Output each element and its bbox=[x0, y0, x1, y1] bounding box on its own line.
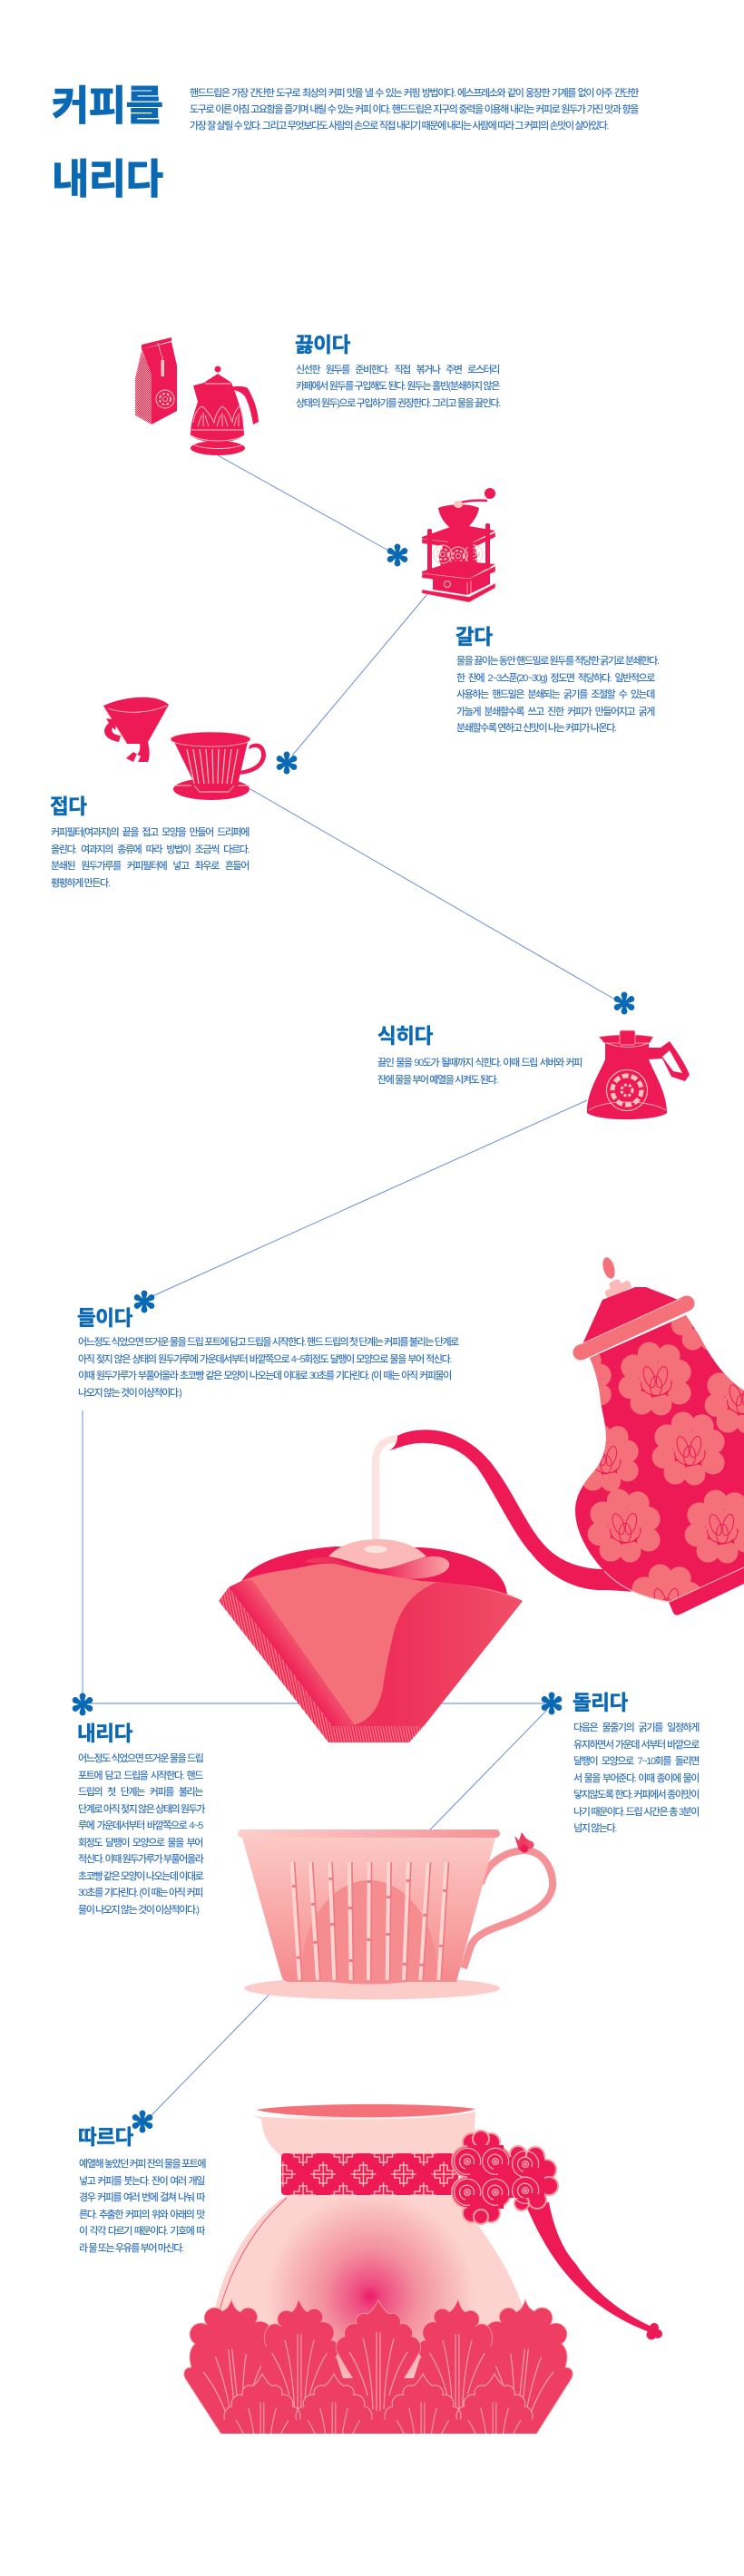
text block: 돌리다: 나기 때문이다. 드립 시간은 총 3분이 bbox=[573, 1807, 699, 1818]
text block: 내리다: 물이 나오지 않는 것이 이상적이다.) bbox=[78, 1905, 199, 1916]
text block: 내리다: 초코빵 같은 모양이 나오는데 이대로 bbox=[78, 1870, 202, 1881]
title: 커피를 bbox=[52, 83, 162, 129]
icon: kettle bbox=[191, 366, 259, 455]
connector line: horizontal to 돌리다 bbox=[83, 1703, 552, 1704]
dripper dome bbox=[301, 1880, 437, 1985]
pot collar bbox=[581, 1299, 687, 1352]
text block: 내리다: 적신다. 이때 원두가루가 부풀어올라 bbox=[78, 1854, 202, 1865]
text block: 갈다: 물을 끓이는 동안 핸드밀로 원두를 적당한 굵기로 분쇄한다. bbox=[456, 656, 659, 667]
heading: 돌리다: 돌리다 bbox=[573, 1692, 628, 1714]
text block: 들이다: 어느정도 식었으면 뜨거운 물을 드립 포트에 담고 드립을 시작한다. 핸드 드립의 첫 단계는 커피를 불리는 단계로 bbox=[78, 1337, 458, 1348]
illustration: large dripper bbox=[238, 1830, 553, 1999]
text block: 들이다: 이때 원두가루가 부풀어올라 초코빵 같은 모양이 나오는데 이대로 30초를 기다린다. (이 때는 아직 커피물이 bbox=[78, 1371, 451, 1381]
pot lid bbox=[582, 1287, 690, 1346]
text block: intro: 핸드드립은 가장 간단한 도구로 최상의 커피 맛을 낼 수 있는 커핑 방법이다. 에스프레소와 같이 웅장한 기계를 없이 아주 간단한 bbox=[190, 87, 638, 98]
title bbox=[52, 83, 163, 202]
pot body bbox=[575, 1315, 744, 1602]
connector line: vertical to 내리다 bbox=[82, 1410, 83, 1703]
server ribbon bbox=[526, 2202, 651, 2333]
pot spout bbox=[387, 1429, 635, 1592]
heading: 따르다: 따르다 bbox=[78, 2126, 133, 2149]
title: 내리다 bbox=[52, 156, 162, 202]
server neck bbox=[251, 2111, 475, 2157]
text block: 끓이다: 상태의 원두)으로 구입하기를 권장한다. 그리고 물을 끓인다. bbox=[296, 397, 500, 408]
text block: 내리다: 루에 가운데서부터 바깥쪽으로 4~5 bbox=[78, 1820, 202, 1831]
text block: 들이다: 아직 젖지 않은 상태의 원두가루에 가운데서부터 바깥쪽으로 4~5회정도 달팽이 모양으로 물을 부어 적신다. bbox=[78, 1353, 451, 1364]
connector line: dripper to server bbox=[250, 789, 615, 1000]
text block: 내리다: 드립의 첫 단계는 커피를 불리는 bbox=[78, 1787, 202, 1798]
text block: 내리다: 단계로 아직 젖지 않은 상태의 원두가 bbox=[78, 1803, 204, 1814]
heading: 들이다: 들이다 bbox=[77, 1307, 132, 1330]
text block: 들이다 bbox=[78, 1337, 459, 1399]
icon: small dripper bbox=[171, 732, 266, 800]
heading: 접다: 접다 bbox=[50, 795, 87, 818]
illustration: large pouring pot bbox=[387, 1256, 744, 1637]
text block: 따르다 bbox=[79, 2159, 205, 2253]
dripper ribs bbox=[292, 1862, 447, 1980]
asterisk markers bbox=[71, 544, 636, 2133]
server lip bbox=[256, 2104, 475, 2117]
text block: 끓이다: 카페에서 원두를 구입해도 된다. 원두는 홀빈(분쇄하지 않은 bbox=[296, 381, 499, 392]
text block: 돌리다: 다음은 물줄기의 굵기를 일정하게 bbox=[573, 1722, 699, 1733]
text block: 돌리다: 달팽이 모양으로 7~10회를 돌리면 bbox=[573, 1756, 699, 1767]
heading: 갈다: 갈다 bbox=[455, 626, 493, 649]
text block: 내리다 bbox=[78, 1752, 205, 1916]
text block: 따르다: 이 각각 다르기 때문이다. 기호에 따 bbox=[79, 2226, 204, 2237]
dripper saucer bbox=[244, 1977, 500, 1999]
icon: paper filter with arrows bbox=[103, 698, 169, 762]
text block: 따르다: 예열해 놓았던 커피 잔의 물을 포트에 bbox=[79, 2159, 205, 2170]
connector line: kettle to grinder bbox=[218, 455, 390, 551]
server body bbox=[200, 2195, 544, 2404]
text block: 갈다: 한 잔에 2~3스푼(20~30g) 정도면 적당하다. 일반적으로 bbox=[456, 673, 654, 684]
text block: 갈다: 분쇄할수록 연하고 신맛이 나는 커피가 나온다. bbox=[456, 723, 616, 734]
text block: 접다: 커피필터(여과지)의 끝을 접고 모양을 만들어 드리퍼에 bbox=[51, 827, 249, 838]
text block: 들이다: 나오지 않는 것이 이상적이다.) bbox=[78, 1388, 181, 1399]
pot foot bbox=[668, 1566, 744, 1615]
heading: 끓이다: 끓이다 bbox=[295, 334, 350, 356]
text block: 따르다: 른다. 추출한 커피의 위와 아래의 맛 bbox=[79, 2210, 204, 2220]
dripper handle bbox=[464, 1850, 553, 1968]
text block: 갈다: 사용하는 핸드밀은 분쇄되는 굵기를 조절할 수 있는데 bbox=[456, 689, 654, 700]
text block: 접다: 분쇄된 원두가루를 커피필터에 넣고 좌우로 흔들어 bbox=[51, 861, 249, 872]
connector line: grinder to filter bbox=[292, 594, 427, 756]
heading: 내리다: 내리다 bbox=[77, 1722, 132, 1745]
text block: intro: 도구로 이른 아침 고요함을 즐기며 내릴 수 있는 커피 이다. 핸드드립은 지구의 중력을 이용해 내리는 커피로 원두가 가진 맛과 향을 bbox=[190, 104, 638, 115]
text block: 접다: 평평하게 만든다. bbox=[51, 878, 109, 889]
text block: 내리다: 어느정도 식었으면 뜨거운 물을 드립 bbox=[78, 1753, 202, 1764]
pot finial bbox=[601, 1256, 632, 1300]
text block: intro bbox=[190, 87, 639, 132]
text block: 따르다: 경우 커피를 여러 번에 걸쳐 나눠 따 bbox=[79, 2192, 204, 2203]
text block: 내리다: 30초를 기다린다. (이 때는 아직 커피 bbox=[78, 1888, 202, 1898]
text block: 돌리다: 유지하면서 가운데 서부터 바깥으로 bbox=[573, 1740, 699, 1751]
dripper body bbox=[242, 1838, 495, 1982]
illustration: large paper filter bbox=[219, 1539, 523, 1742]
text block: 끓이다: 신선한 원두를 준비한다. 직접 볶거나 주변 로스터리 bbox=[296, 365, 499, 376]
server band pattern bbox=[281, 2153, 458, 2195]
text block: 내리다: 포트에 담고 드립을 시작한다. 핸드 bbox=[78, 1771, 202, 1781]
heading: 식히다: 식히다 bbox=[377, 1025, 433, 1048]
dripper rim bbox=[238, 1830, 500, 1838]
connector line: server to pouring step bbox=[152, 1100, 587, 1296]
text block: 따르다: 넣고 커피를 붓는다. 잔이 여러 개일 bbox=[79, 2175, 204, 2186]
illustration: large server bbox=[183, 2104, 662, 2434]
text block: 따르다: 라 물 또는 우유를 부어 마신다. bbox=[79, 2242, 183, 2253]
icon: glass server bbox=[587, 1030, 690, 1119]
dripper handle ornament bbox=[514, 1832, 534, 1852]
text block: 식히다: 잔에 물을 부어 예열을 시켜도 된다. bbox=[377, 1074, 497, 1085]
connector line: 돌리다 to 따르다 bbox=[150, 1710, 547, 2117]
text block: 돌리다: 넘지 않는다. bbox=[573, 1823, 616, 1834]
text block: 돌리다 bbox=[573, 1722, 700, 1834]
text block: 갈다: 가늘게 분쇄할수록 쓰고 진한 커피가 만들어지고 굵게 bbox=[456, 706, 654, 717]
text block: 식히다 bbox=[377, 1058, 582, 1085]
text block: 돌리다: 서 물을 부어준다. 이때 종이에 물이 bbox=[573, 1772, 699, 1783]
text block: 돌리다: 닿지않도록 한다. 커피에서 종이맛이 bbox=[573, 1790, 699, 1800]
illustration: water stream bbox=[376, 1439, 396, 1547]
text block: 내리다: 회정도 달팽이 모양으로 물을 부어 bbox=[78, 1838, 202, 1849]
text block: intro: 가장 잘 살릴 수 있다. 그리고 무엇보다도 사람의 손으로 직접 내리기 때문에 내리는 사람에 따라 그 커피의 손맛이 살아있다. bbox=[190, 121, 608, 132]
server lotus leaves bbox=[183, 2298, 573, 2434]
text block: 접다: 올린다. 여과지의 종류에 따라 방법이 조금씩 다르다. bbox=[51, 844, 249, 854]
icon: coffee grinder bbox=[422, 488, 495, 602]
text block: 식히다: 끓인 물을 90도가 될때까지 식힌다. 이때 드립 서버와 커피 bbox=[377, 1058, 582, 1068]
text block: 끓이다 bbox=[296, 365, 501, 408]
text block: 갈다 bbox=[456, 655, 659, 734]
icon: coffee bag bbox=[135, 337, 177, 424]
server knot bbox=[452, 2131, 558, 2224]
text block: 접다 bbox=[51, 827, 249, 889]
pot peony pattern bbox=[583, 1315, 744, 1602]
